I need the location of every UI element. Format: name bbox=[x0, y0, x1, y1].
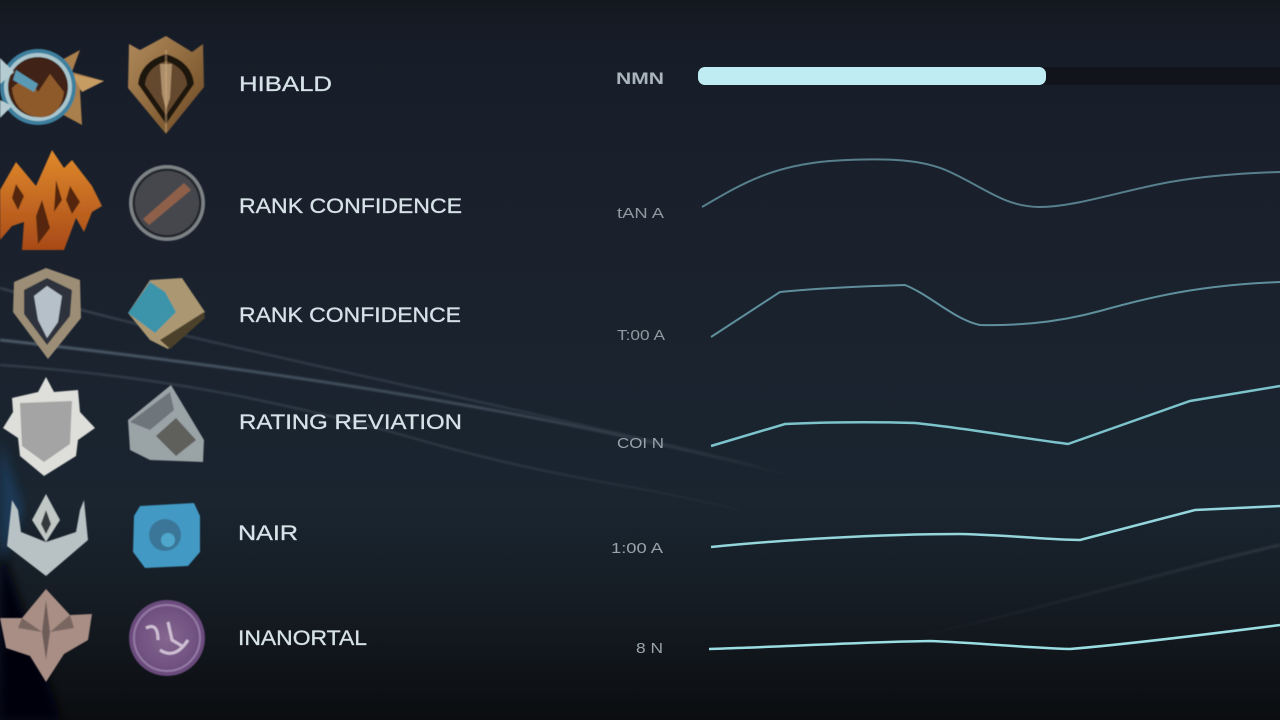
line chart bbox=[702, 159, 1280, 207]
value label: T:00 A bbox=[617, 327, 665, 344]
label: INANORTAL bbox=[238, 626, 367, 650]
label: RANK CONFIDENCE bbox=[239, 194, 462, 218]
icon: teal and gold gem bbox=[128, 278, 205, 349]
icon: silver crown chevron bbox=[7, 494, 88, 576]
line chart bbox=[711, 282, 1280, 337]
icon: bronze ring emblem with star bbox=[0, 49, 104, 125]
value label: NMN bbox=[616, 69, 664, 88]
icon: orange flame crest bbox=[0, 150, 102, 250]
row 6: INANORTAL bbox=[0, 589, 1280, 682]
line chart bbox=[711, 506, 1280, 547]
icon: silver faceted gem bbox=[128, 385, 204, 462]
icon: bronze shield bbox=[128, 36, 204, 134]
value label: tAN A bbox=[617, 205, 664, 222]
row 5: NAIR bbox=[7, 494, 1280, 576]
progress bar bbox=[698, 67, 1280, 85]
icon: grey round badge bbox=[129, 165, 205, 241]
line chart bbox=[711, 386, 1280, 446]
label: NAIR bbox=[238, 521, 298, 545]
row 4: RATING REVIATION bbox=[3, 377, 1280, 476]
value label: 1:00 A bbox=[611, 540, 663, 557]
label: RANK CONFIDENCE bbox=[239, 303, 461, 327]
icon: white shield emblem bbox=[3, 377, 95, 476]
icon: rose winged emblem bbox=[0, 589, 92, 682]
row 1: HIBALD bbox=[0, 36, 1280, 134]
label: HIBALD bbox=[239, 72, 332, 96]
icon: silver and bronze shield bbox=[13, 268, 81, 359]
value label: COI N bbox=[617, 435, 664, 452]
value label: 8 N bbox=[636, 640, 663, 657]
line chart bbox=[709, 625, 1280, 649]
row 2: RANK CONFIDENCE bbox=[0, 150, 1280, 250]
row 3: RANK CONFIDENCE bbox=[13, 268, 1280, 359]
icon: purple round medallion bbox=[129, 600, 205, 676]
label: RATING REVIATION bbox=[239, 410, 462, 434]
icon: blue rounded gem bbox=[133, 503, 200, 568]
